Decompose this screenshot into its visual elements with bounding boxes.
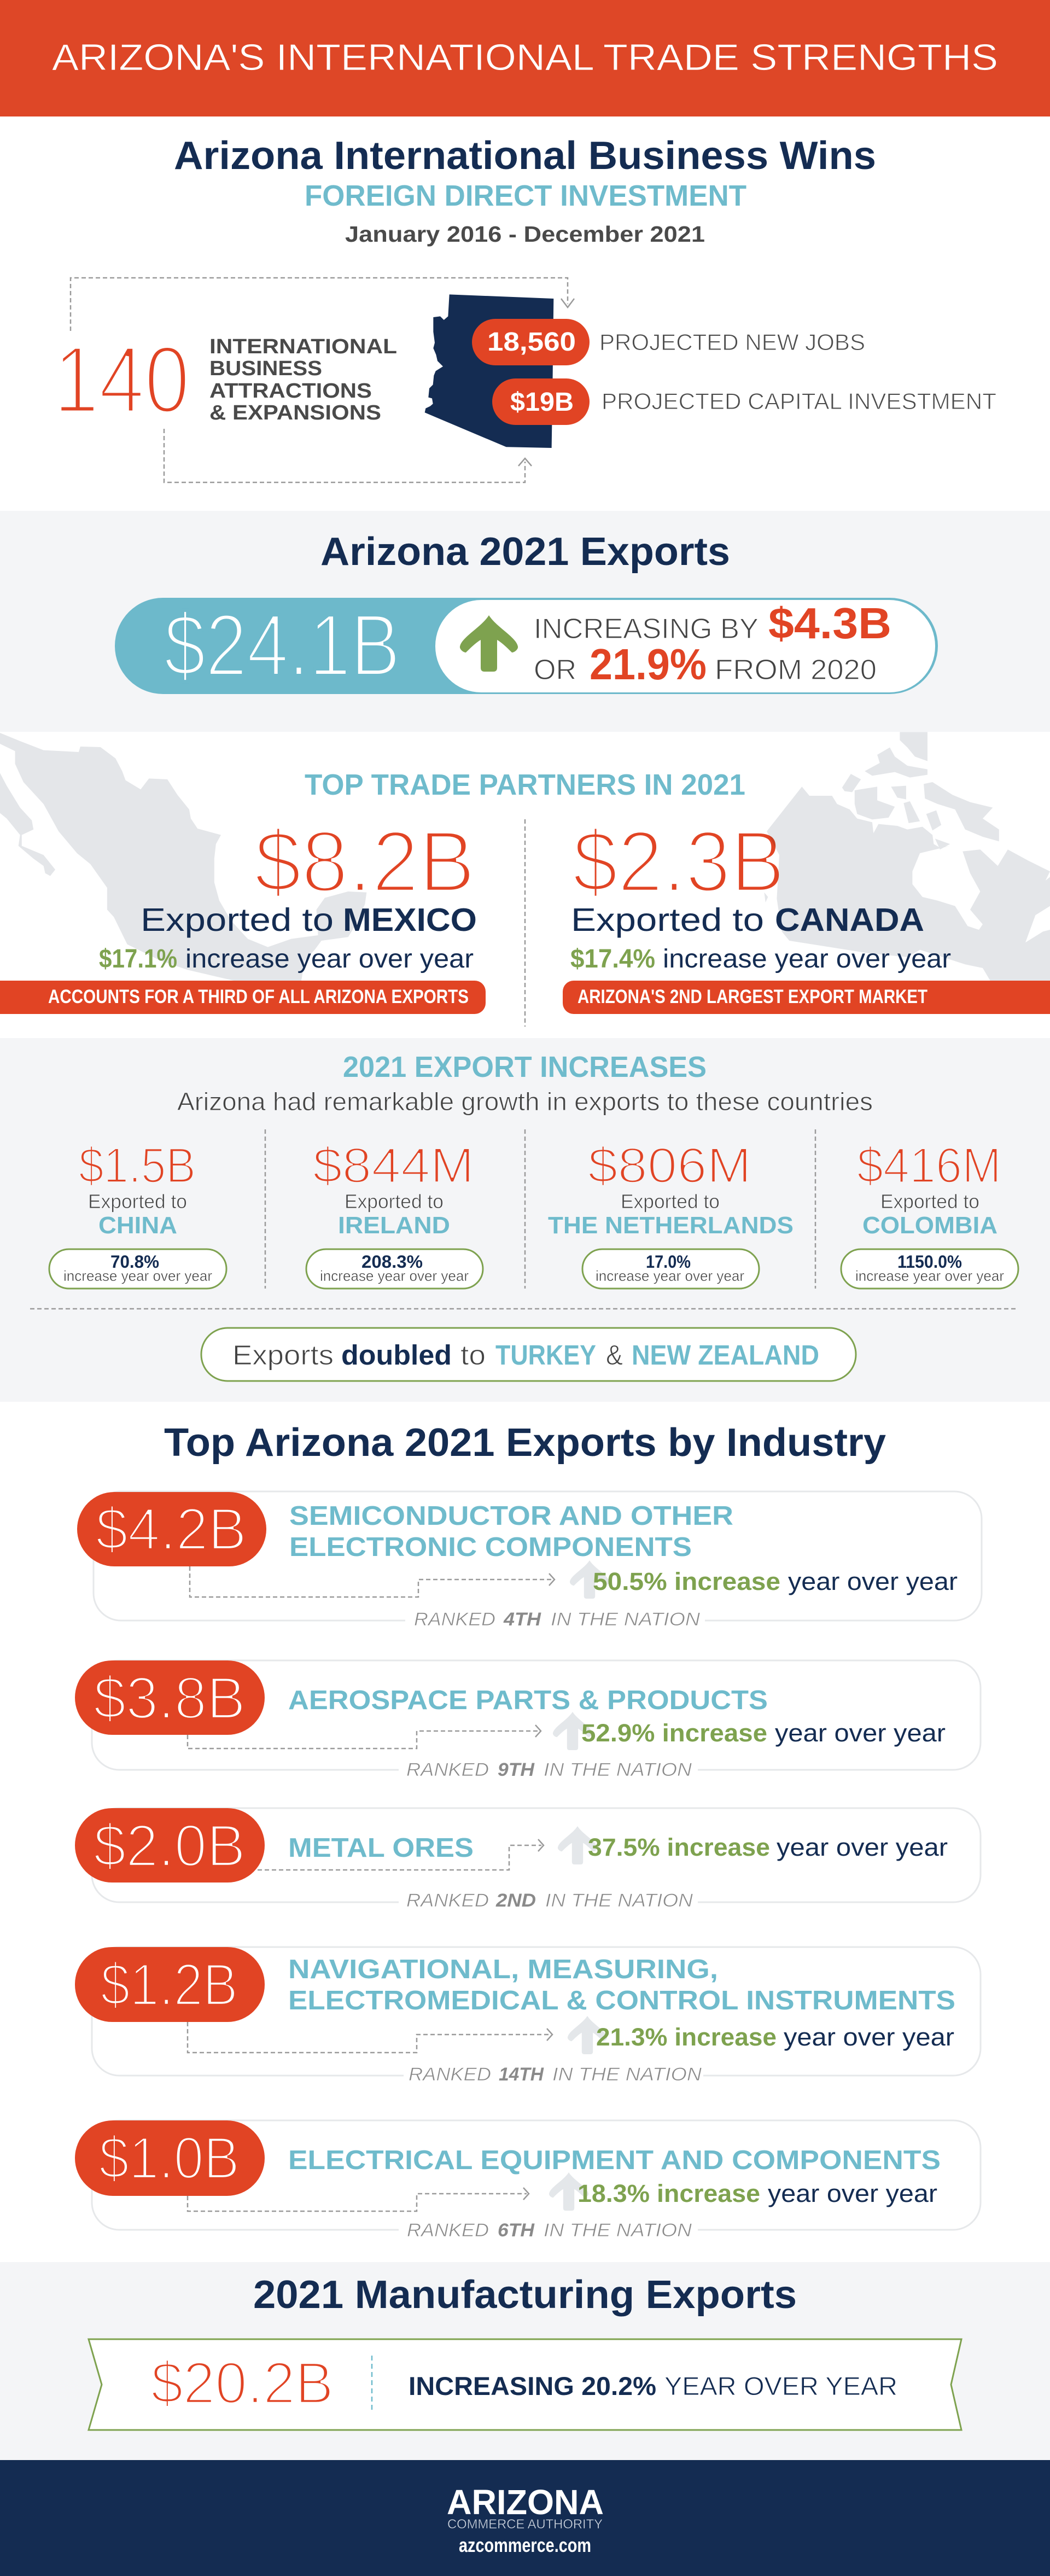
panel: top trade partners (0, 732, 1050, 1027)
column: Colombia: $416M (857, 1138, 1001, 1193)
column: The Netherlands: THE NETHERLANDS (548, 1212, 794, 1239)
column: Ireland: IRELAND (338, 1212, 450, 1239)
growth text: year over year (775, 1719, 946, 1747)
growth text: year over year (784, 2023, 954, 2051)
stat: Mexico $8.2B: $8.2B (254, 813, 475, 910)
rank: RANKED (406, 1890, 489, 1911)
logo: Arizona Commerce Authority: COMMERCE AUTHORITY (447, 2517, 603, 2532)
column: China: 70.8% (110, 1252, 159, 1272)
subheading: foreign direct investment: FOREIGN DIRECT INVESTMENT (305, 179, 746, 212)
rank: IN THE NATION (552, 2064, 702, 2085)
growth text: 18.3% increase (578, 2179, 760, 2207)
stat pill: capital investment (492, 378, 590, 425)
text block: Mexico: MEXICO (343, 902, 477, 938)
heading: exports by industry: Top Arizona 2021 Exports by Industry (164, 1421, 886, 1465)
heading: top trade partners: TOP TRADE PARTNERS IN 2021 (305, 768, 745, 801)
exports pill (115, 596, 938, 695)
column: The Netherlands: increase year over year (596, 1268, 744, 1284)
stat pill: projected jobs (472, 319, 590, 365)
panel: business wins (54, 134, 996, 482)
growth text: 50.5% increase (593, 1567, 780, 1595)
stat pill: projected jobs: 18,560 (487, 328, 576, 357)
label: attractions and expansions: INTERNATIONAL (209, 335, 397, 358)
arrow: dashed top connector (71, 278, 574, 331)
column: Colombia (841, 1138, 1018, 1289)
growth text (578, 2179, 937, 2207)
arrow: dashed connector (188, 2188, 529, 2211)
map: Arizona (425, 294, 553, 448)
arrow: dashed connector (258, 1839, 544, 1870)
arrow: dashed bottom connector (164, 429, 532, 482)
heading: Arizona 2021 exports: Arizona 2021 Exports (320, 530, 730, 574)
increase by text: 21.9% (590, 640, 707, 689)
title: ARIZONA'S INTERNATIONAL TRADE STRENGTHS (52, 37, 998, 78)
column: China: CHINA (98, 1212, 177, 1239)
icon: gray up arrow (553, 1712, 592, 1750)
map: Canada (764, 732, 1050, 981)
stat: $24.1B: $24.1B (164, 596, 400, 695)
date range: January 2016 - December 2021 (345, 222, 705, 247)
column: Colombia: Exported to (880, 1190, 979, 1213)
growth text: 21.3% increase (596, 2023, 777, 2051)
column: China: $1.5B (79, 1138, 196, 1193)
industry name: AEROSPACE PARTS & PRODUCTS (288, 1686, 768, 1715)
column: The Netherlands: $806M (588, 1138, 751, 1193)
increase by text: INCREASING BY (534, 613, 759, 645)
rank: IN THE NATION (545, 1890, 693, 1911)
column: Ireland: increase year over year (320, 1268, 469, 1284)
icon: gray up arrow (570, 1560, 609, 1599)
stat: Canada $2.3B: $2.3B (573, 813, 785, 910)
callout: Mexico share (0, 981, 486, 1014)
text block: Mexico: increase year over year (185, 945, 474, 974)
arrow: dashed connector (188, 1725, 541, 1749)
arrow: dashed connector (188, 2022, 552, 2053)
label: attractions and expansions: & EXPANSIONS (209, 401, 381, 424)
increase by text: $4.3B (768, 599, 891, 648)
callout: Canada rank: ARIZONA'S 2ND LARGEST EXPORT MARKET (578, 986, 928, 1007)
text block: Mexico: Exported to (141, 902, 334, 938)
rank: 14TH (499, 2064, 544, 2085)
text block: Mexico: $17.1% (99, 945, 177, 974)
rank: 9TH (498, 1759, 535, 1780)
card: metal ores (75, 1808, 981, 1911)
value pill: $1.0B (99, 2125, 240, 2192)
column: The Netherlands: 17.0% (646, 1252, 691, 1272)
industry name: ELECTRICAL EQUIPMENT AND COMPONENTS (288, 2146, 941, 2175)
industry name: ELECTROMEDICAL & CONTROL INSTRUMENTS (288, 1986, 955, 2015)
column: China: increase year over year (63, 1268, 212, 1284)
panel: exports by industry (75, 1421, 982, 2241)
growth text: year over year (768, 2179, 937, 2207)
ribbon text: YEAR OVER YEAR (664, 2371, 897, 2400)
panel: title banner (0, 0, 1050, 116)
rank (414, 1609, 700, 1630)
rank: RANKED (409, 2064, 491, 2085)
footer (0, 2460, 1050, 2576)
industry name: METAL ORES (288, 1833, 474, 1863)
column: Colombia: COLOMBIA (862, 1212, 998, 1239)
logo: Arizona Commerce Authority: ARIZONA (447, 2482, 604, 2522)
card: semiconductors (77, 1491, 982, 1630)
callout: exports doubled: Exports (232, 1339, 334, 1371)
industry name: ELECTRONIC COMPONENTS (289, 1532, 692, 1562)
growth text: 52.9% increase (581, 1719, 767, 1747)
increase by text: FROM 2020 (715, 654, 877, 686)
growth text (588, 1833, 948, 1861)
heading: manufacturing exports: 2021 Manufacturing Exports (253, 2273, 797, 2317)
column: Ireland (306, 1138, 483, 1289)
stat: $20.2B: $20.2B (151, 2350, 334, 2416)
ribbon text (409, 2371, 897, 2400)
growth text: 37.5% increase (588, 1833, 770, 1861)
callout: exports doubled: NEW ZEALAND (632, 1339, 819, 1371)
stat: 140: 140 (54, 326, 190, 433)
card: navigational instruments (75, 1947, 981, 2085)
icon: gray up arrow (549, 2172, 588, 2211)
rank (409, 2064, 702, 2085)
callout: exports doubled: to (460, 1339, 486, 1371)
rank: 6TH (498, 2220, 535, 2241)
callout: Mexico share: ACCOUNTS FOR A THIRD OF ALL ARIZONA EXPORTS (48, 986, 469, 1007)
label: projected capital investment: PROJECTED CAPITAL INVESTMENT (602, 388, 996, 414)
text block: Canada: increase year over year (663, 945, 951, 974)
heading: export increases: 2021 EXPORT INCREASES (343, 1051, 707, 1083)
column: China: Exported to (88, 1190, 187, 1213)
column: The Netherlands: Exported to (621, 1190, 720, 1213)
rank: RANKED (414, 1609, 495, 1630)
card: electrical equipment (75, 2120, 981, 2241)
industry name: NAVIGATIONAL, MEASURING, (288, 1955, 718, 1984)
icon: gray up arrow (558, 1826, 597, 1864)
industry name (289, 1501, 733, 1562)
callout: exports doubled: doubled (341, 1339, 452, 1371)
rank: RANKED (406, 1759, 489, 1780)
icon: gray up arrow (568, 2016, 607, 2054)
growth text: year over year (777, 1833, 948, 1861)
card: aerospace (75, 1660, 981, 1780)
increase by text: OR (534, 654, 576, 686)
rank: 2ND (495, 1890, 536, 1911)
column: Colombia: increase year over year (855, 1268, 1004, 1284)
callout: exports doubled (201, 1328, 856, 1381)
text block: Canada: $17.4% (570, 945, 655, 974)
growth text (596, 2023, 954, 2051)
heading: business wins: Arizona International Business Wins (174, 134, 876, 178)
text block: Canada: CANADA (775, 902, 924, 938)
growth text (581, 1719, 946, 1747)
text block: Canada (570, 902, 951, 974)
arrow: dashed connector (190, 1566, 555, 1597)
ribbon text: INCREASING 20.2% (409, 2371, 656, 2400)
text block: Canada: Exported to (571, 902, 764, 938)
ribbon (89, 2339, 961, 2430)
rank: 4TH (503, 1609, 542, 1630)
rank (406, 1890, 693, 1911)
panel: 2021 exports (0, 511, 1050, 732)
panel: manufacturing exports (0, 2262, 1050, 2460)
rank: IN THE NATION (544, 1759, 692, 1780)
text block: Mexico (99, 902, 477, 974)
industry name: SEMICONDUCTOR AND OTHER (289, 1501, 733, 1531)
website: azcommerce.com (459, 2534, 591, 2556)
rank: IN THE NATION (551, 1609, 700, 1630)
stat pill: capital investment: $19B (510, 388, 574, 417)
value pill: $3.8B (94, 1665, 246, 1732)
rank: IN THE NATION (544, 2220, 692, 2241)
industry name (288, 1955, 955, 2015)
value pill: $2.0B (94, 1812, 246, 1879)
column: Ireland: Exported to (345, 1190, 444, 1213)
callout: Canada rank (563, 981, 1050, 1014)
label: projected new jobs: PROJECTED NEW JOBS (599, 329, 865, 355)
growth text: year over year (788, 1567, 958, 1595)
rank: RANKED (407, 2220, 489, 2241)
map: Mexico (0, 733, 366, 981)
column: The Netherlands (548, 1138, 794, 1289)
callout: exports doubled: & (606, 1339, 623, 1371)
rank (406, 1759, 692, 1780)
value pill: $1.2B (101, 1951, 238, 2018)
increase by text (534, 599, 891, 689)
panel: export increases (0, 1038, 1050, 1402)
callout: exports doubled: TURKEY (495, 1339, 596, 1371)
value pill: $4.2B (96, 1496, 247, 1563)
column: Ireland: 208.3% (361, 1252, 423, 1272)
rank (407, 2220, 692, 2241)
label: attractions and expansions (209, 335, 397, 424)
label: attractions and expansions: ATTRACTIONS (209, 380, 372, 403)
column: China (49, 1138, 226, 1289)
growth text (593, 1567, 958, 1595)
column: Ireland: $844M (313, 1138, 474, 1193)
label: attractions and expansions: BUSINESS (209, 357, 322, 380)
column: Colombia: 1150.0% (897, 1252, 962, 1272)
icon: green up arrow (460, 615, 518, 672)
subtitle: Arizona had remarkable growth in exports to these countries (177, 1087, 873, 1116)
